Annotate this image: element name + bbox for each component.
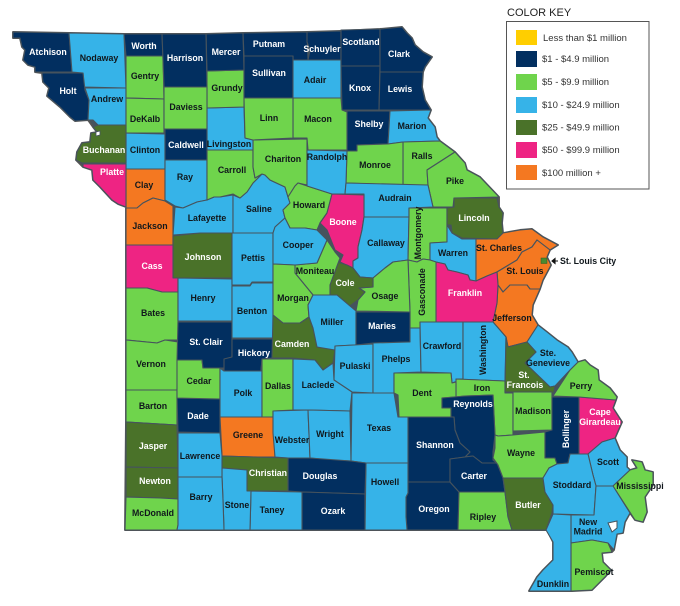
key: $100 million +	[516, 165, 601, 180]
county: Carroll	[207, 150, 262, 200]
color key frame	[506, 22, 649, 189]
label: Scott: Scott	[597, 457, 619, 467]
label: Washington: Washington	[478, 325, 488, 375]
county: Shelby	[347, 111, 390, 151]
callout: St. Louis City: St. Louis City	[560, 256, 616, 266]
county: Phelps	[373, 328, 421, 393]
county: Shannon	[408, 417, 470, 482]
county: Ripley	[458, 492, 512, 530]
label: Henry: Henry	[191, 293, 216, 303]
county: Adair	[293, 60, 341, 98]
label: New Madrid	[574, 517, 602, 536]
label: Howell: Howell	[371, 477, 399, 487]
key: $10 - $24.9 million	[516, 97, 620, 113]
label: Perry: Perry	[570, 381, 592, 391]
county: St. Louis	[497, 240, 551, 292]
label: Schuyler: Schuyler	[303, 44, 341, 54]
county: Dent	[394, 373, 456, 417]
label: Livingston: Livingston	[207, 139, 251, 149]
label: Grundy: Grundy	[211, 83, 243, 93]
county: Maries	[356, 312, 410, 345]
color key panel	[506, 7, 649, 189]
label: Texas: Texas	[367, 423, 391, 433]
label: Mississippi: Mississippi	[616, 481, 664, 491]
label: Douglas: Douglas	[303, 471, 337, 481]
county: Morgan	[273, 264, 313, 323]
county: Lewis	[379, 72, 431, 110]
county: Reynolds	[442, 395, 497, 463]
county: Barry	[177, 477, 224, 530]
county: Schuyler	[307, 31, 341, 60]
key: less than $1 million: Less than $1 million	[543, 33, 627, 44]
county: Audrain	[345, 183, 433, 217]
label: Butler: Butler	[515, 500, 541, 510]
label: Lincoln: Lincoln	[458, 213, 490, 223]
county: Texas	[351, 393, 408, 463]
label: Nodaway: Nodaway	[80, 53, 118, 63]
county: Howard	[283, 183, 332, 230]
label: Clark: Clark	[388, 49, 410, 59]
label: Greene: Greene	[233, 430, 263, 440]
color key title: COLOR KEY	[507, 7, 572, 19]
county: Lawrence	[178, 433, 222, 477]
county: Pettis	[232, 233, 273, 285]
county: Polk	[220, 359, 262, 417]
label: Cole: Cole	[335, 278, 355, 288]
label: Adair: Adair	[304, 75, 327, 85]
county: Barton	[126, 390, 177, 425]
county: Bollinger	[545, 397, 579, 464]
label: Sullivan: Sullivan	[252, 68, 286, 78]
label: McDonald: McDonald	[132, 508, 174, 518]
label: Webster: Webster	[275, 435, 310, 445]
county: Clark	[380, 27, 432, 72]
county: Lincoln	[447, 198, 503, 239]
label: Cooper: Cooper	[283, 240, 314, 250]
label: Linn: Linn	[260, 113, 278, 123]
county: Stoddard	[543, 454, 596, 515]
label: Scotland: Scotland	[342, 37, 380, 47]
label: Madison: Madison	[515, 406, 551, 416]
label: St. Charles: St. Charles	[476, 243, 522, 253]
county: Platte	[83, 164, 126, 207]
key: $100 million +: $100 million +	[542, 168, 601, 179]
label: Barry: Barry	[190, 492, 213, 502]
label: Clay: Clay	[135, 180, 153, 190]
label: Hickory: Hickory	[238, 348, 270, 358]
label: Benton: Benton	[237, 306, 267, 316]
county: Jasper	[126, 422, 178, 468]
label: Phelps: Phelps	[382, 354, 411, 364]
label: Clinton: Clinton	[130, 145, 160, 155]
label: Crawford: Crawford	[423, 341, 461, 351]
label: Johnson: Johnson	[185, 252, 221, 262]
county: Buchanan	[76, 125, 126, 163]
county: Stone	[222, 468, 251, 530]
county: Webster	[273, 410, 310, 458]
label: Camden: Camden	[275, 339, 309, 349]
county: Cass	[126, 245, 178, 292]
key: $10 - $24.9 million: $10 - $24.9 million	[542, 100, 620, 111]
label: Saline: Saline	[246, 204, 272, 214]
label: Audrain: Audrain	[378, 193, 412, 203]
county: Moniteau	[295, 240, 340, 295]
key: $1 - $4.9 million: $1 - $4.9 million	[542, 54, 609, 65]
label: Oregon: Oregon	[418, 504, 450, 514]
county: DeKalb	[126, 98, 164, 133]
label: Atchison: Atchison	[29, 47, 67, 57]
county: Sullivan	[244, 56, 293, 98]
key: $5 - $9.9 million	[516, 74, 609, 90]
county: Callaway	[353, 217, 409, 278]
county: Pemiscot	[571, 540, 612, 591]
county: Atchison	[13, 32, 72, 72]
label: Ray: Ray	[177, 172, 193, 182]
label: Mercer: Mercer	[212, 47, 241, 57]
county: Iron	[456, 379, 513, 436]
county: Miller	[308, 295, 356, 350]
label: Reynolds: Reynolds	[453, 399, 493, 409]
label: Ste. Genevieve: Ste.	[540, 348, 556, 358]
label: Caldwell: Caldwell	[168, 140, 204, 150]
county: Howell	[365, 463, 408, 530]
label: Barton: Barton	[139, 401, 167, 411]
label: Dunklin: Dunklin	[537, 579, 569, 589]
county: Mercer	[206, 33, 244, 71]
label: DeKalb: DeKalb	[130, 114, 161, 124]
label: Lewis: Lewis	[388, 84, 412, 94]
county: Andrew	[85, 88, 126, 125]
label: Pemiscot: Pemiscot	[574, 567, 614, 577]
label: New Madrid: Madrid	[574, 526, 602, 536]
county: Madison	[513, 392, 552, 431]
county: Clinton	[126, 133, 165, 169]
county: Nodaway	[69, 33, 126, 88]
label: Maries: Maries	[368, 321, 396, 331]
label: Newton: Newton	[139, 476, 171, 486]
label: Knox: Knox	[349, 83, 371, 93]
label: Dade: Dade	[187, 411, 209, 421]
county: Lafayette	[173, 195, 233, 235]
label: St. Clair: St. Clair	[189, 337, 223, 347]
county: Vernon	[126, 340, 178, 390]
label: St. Louis: St. Louis	[506, 266, 544, 276]
label: Ste. Genevieve	[526, 348, 570, 368]
county: Ralls	[403, 141, 455, 185]
county: Livingston	[207, 107, 253, 150]
label: Callaway: Callaway	[367, 238, 405, 248]
county: Henry	[178, 278, 232, 321]
label: Platte: Platte	[100, 167, 124, 177]
county: Dade	[177, 398, 220, 433]
label: Warren: Warren	[438, 248, 468, 258]
county: Harrison	[162, 34, 207, 87]
label: Buchanan: Buchanan	[83, 145, 125, 155]
label: Ripley: Ripley	[470, 512, 496, 522]
county: Gasconade	[408, 259, 436, 328]
county: Monroe	[346, 142, 403, 185]
county: Putnam	[243, 32, 308, 60]
county: Clay	[126, 169, 173, 208]
label: Cape Girardeau	[579, 407, 621, 427]
label: Boone: Boone	[329, 217, 357, 227]
label: Howard: Howard	[293, 200, 325, 210]
county: Macon	[293, 98, 347, 150]
county: St. Clair	[177, 322, 232, 368]
county: Scott	[588, 438, 630, 486]
label: Lawrence: Lawrence	[180, 451, 220, 461]
county: Cole	[330, 262, 373, 306]
label: Bates: Bates	[141, 308, 165, 318]
county: Dunklin	[529, 514, 571, 591]
label: Pulaski: Pulaski	[340, 361, 370, 371]
label: Taney: Taney	[260, 505, 284, 515]
county: Worth	[124, 34, 163, 56]
label: Wright: Wright	[316, 429, 344, 439]
label: Wayne: Wayne	[507, 448, 535, 458]
county: Pulaski	[334, 344, 373, 393]
label: Vernon: Vernon	[136, 359, 166, 369]
county: Greene	[220, 417, 275, 457]
county: Marion	[388, 110, 440, 144]
county: Boone	[320, 194, 364, 268]
county: Cooper	[273, 218, 327, 265]
label: Stone: Stone	[225, 500, 249, 510]
label: Ste. Genevieve: Genevieve	[526, 358, 570, 368]
label: Shannon: Shannon	[416, 440, 454, 450]
label: Ralls: Ralls	[411, 151, 433, 161]
label: Holt: Holt	[59, 86, 77, 96]
label: Dent: Dent	[412, 388, 432, 398]
label: Jasper: Jasper	[139, 441, 168, 451]
county: Osage	[356, 260, 410, 312]
label: Jackson: Jackson	[132, 221, 168, 231]
label: Worth: Worth	[131, 41, 157, 51]
county: Ozark	[302, 492, 365, 530]
county: Washington	[456, 322, 506, 381]
county: Dallas	[262, 359, 293, 417]
county: Crawford	[420, 322, 463, 383]
county: Scotland	[341, 29, 380, 66]
county: Douglas	[288, 458, 366, 494]
county: Holt	[42, 73, 89, 121]
label: Gasconade: Gasconade	[417, 268, 427, 316]
label: Montgomery: Montgomery	[413, 207, 423, 259]
county: Mississippi	[613, 460, 653, 522]
label: Ozark: Ozark	[321, 506, 345, 516]
label: Moniteau: Moniteau	[296, 266, 334, 276]
label: Cass: Cass	[141, 261, 163, 271]
county: Caldwell	[165, 129, 207, 160]
label: Cape Girardeau: Cape	[589, 407, 611, 417]
river gap: Buchanan bend	[96, 131, 100, 136]
county: Laclede	[293, 359, 352, 411]
label: Macon: Macon	[304, 114, 332, 124]
label: Daviess: Daviess	[169, 102, 203, 112]
label: Iron: Iron	[474, 383, 490, 393]
county: Jackson	[126, 198, 173, 245]
county: Camden	[272, 315, 335, 370]
county: Daviess	[164, 87, 207, 129]
county: Linn	[244, 98, 293, 140]
label: Gentry: Gentry	[131, 71, 159, 81]
river gap: New Madrid bend	[608, 521, 617, 532]
key: $25 - $49.9 million: $25 - $49.9 million	[542, 122, 620, 134]
county: Warren	[430, 225, 476, 281]
label: Miller: Miller	[321, 317, 344, 327]
county: Montgomery	[408, 208, 447, 262]
label: Christian: Christian	[249, 468, 287, 478]
label: St. Francois: St.	[518, 370, 530, 380]
county: Cape Girardeau	[579, 397, 622, 454]
label: Andrew: Andrew	[91, 94, 123, 104]
county: Hickory	[224, 339, 273, 371]
key: less than $1 million	[516, 30, 627, 45]
county: Knox	[341, 66, 380, 110]
label: Morgan: Morgan	[277, 293, 309, 303]
county: Wright	[308, 410, 351, 461]
label: Lafayette: Lafayette	[188, 213, 226, 223]
label: Pettis: Pettis	[241, 253, 265, 263]
county: McDonald	[125, 497, 178, 530]
label: Shelby: Shelby	[355, 119, 384, 129]
county: Johnson	[173, 233, 232, 278]
label: Bollinger: Bollinger	[561, 409, 571, 448]
label: St. Francois: Francois	[507, 380, 543, 390]
key: $50 - $99.9 million: $50 - $99.9 million	[542, 145, 620, 156]
county: New Madrid	[571, 486, 630, 550]
county: St. Francois	[505, 337, 555, 396]
county: St. Charles	[476, 229, 558, 281]
county: Butler	[503, 478, 553, 530]
county: Carter	[450, 456, 505, 492]
label: Cedar: Cedar	[187, 376, 212, 386]
county: Taney	[250, 491, 302, 530]
label: Carter: Carter	[461, 471, 488, 481]
county: Cedar	[177, 360, 220, 399]
county: Ste. Genevieve	[525, 325, 578, 387]
county: Pike	[427, 152, 499, 207]
label: Pike: Pike	[446, 176, 464, 186]
county: Gentry	[126, 56, 164, 99]
key: $25 - $49.9 million	[516, 120, 620, 135]
county: Bates	[126, 288, 178, 343]
label: Stoddard: Stoddard	[553, 480, 591, 490]
label: Osage: Osage	[372, 291, 399, 301]
label: St. Francois	[507, 370, 543, 390]
label: Polk: Polk	[234, 388, 252, 398]
key: $50 - $99.9 million	[516, 142, 620, 158]
county: Newton	[126, 467, 178, 499]
label: Marion: Marion	[398, 121, 426, 131]
county: Christian	[222, 456, 288, 491]
St. Louis City marker	[541, 258, 547, 264]
label: Laclede: Laclede	[302, 380, 334, 390]
label: Carroll: Carroll	[218, 165, 246, 175]
key: $1 - $4.9 million	[516, 51, 609, 67]
county: Saline	[233, 174, 290, 233]
label: Chariton: Chariton	[265, 154, 301, 164]
county: Wayne	[493, 432, 557, 478]
county: Jefferson	[493, 285, 540, 347]
county: Chariton	[253, 139, 307, 197]
county: Franklin	[436, 262, 498, 322]
county: Perry	[553, 360, 617, 400]
label: Putnam: Putnam	[253, 39, 285, 49]
label: Harrison: Harrison	[167, 53, 203, 63]
county: Ray	[165, 160, 207, 208]
label: Monroe: Monroe	[359, 160, 391, 170]
label: Jefferson: Jefferson	[492, 313, 532, 323]
label: Cape Girardeau: Girardeau	[579, 417, 621, 427]
label: Dallas: Dallas	[265, 381, 291, 391]
label: Franklin: Franklin	[448, 288, 482, 298]
key: $5 - $9.9 million: $5 - $9.9 million	[542, 77, 609, 88]
county: Randolph	[307, 150, 347, 194]
county: Oregon	[406, 482, 459, 530]
county: Benton	[232, 283, 273, 338]
label: Randolph: Randolph	[307, 152, 347, 162]
county: Grundy	[207, 70, 244, 108]
label: New Madrid: New	[579, 517, 597, 527]
